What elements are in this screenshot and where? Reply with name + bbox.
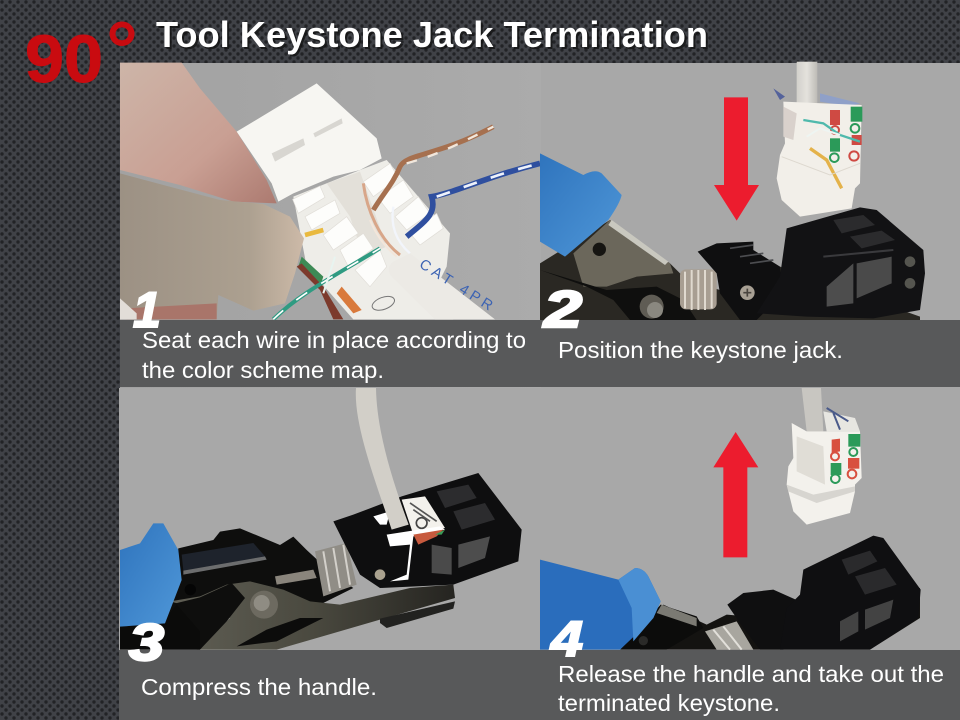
photo: jaw head <box>698 242 783 320</box>
photo: crimp tool body <box>640 588 920 650</box>
panel: step 3 compress the handle <box>119 388 541 720</box>
photo: jaw head <box>727 590 803 650</box>
caption: step 4: Release the handle and take out the <box>558 661 944 687</box>
step number 2: 2 <box>543 281 582 339</box>
photo: handle shaft <box>620 605 703 650</box>
panel: step 4 release and remove <box>540 388 960 720</box>
photo: cable <box>389 253 495 319</box>
panel: step 2 position the jack <box>540 62 960 388</box>
photo: keystone jack <box>787 408 862 525</box>
panel: step 1 seat wires <box>120 63 541 388</box>
caption: step 3 <box>119 650 541 720</box>
photo: cable: CAT 4PR <box>416 256 495 314</box>
photo: cable <box>797 62 817 110</box>
photo: cable <box>802 388 823 431</box>
photo: cable <box>356 388 409 530</box>
step number 1: 1 <box>133 282 161 338</box>
photo: keystone top in tool <box>373 496 445 581</box>
caption: step 1: the color scheme map. <box>142 357 384 383</box>
caption: step 2: Position the keystone jack. <box>558 337 843 363</box>
photo: blue wire <box>392 163 540 253</box>
photo: black die block <box>757 207 925 318</box>
step number 4: 4 <box>550 611 583 667</box>
arrow: down <box>714 97 759 221</box>
caption: step 4 <box>541 650 960 720</box>
photo: collar <box>705 621 753 650</box>
photo: index finger <box>120 63 277 203</box>
photo: keystone jack <box>773 88 862 217</box>
photo: brown wire <box>363 127 493 257</box>
caption: step 1 <box>120 320 541 387</box>
step number 3: 3 <box>129 614 164 672</box>
photo: die block <box>333 473 522 588</box>
photo: grip shadow <box>120 605 200 650</box>
photo: screw collar <box>680 269 717 310</box>
logo: 90 degrees: 90 <box>25 22 103 97</box>
arrow: up <box>713 432 758 557</box>
photo: yellow wire <box>305 230 323 235</box>
caption: step 4: terminated keystone. <box>558 690 780 716</box>
title: Tool Keystone Jack Termination <box>156 14 708 55</box>
photo: crimp tool upper arm <box>170 528 353 608</box>
title: Tool Keystone Jack Termination <box>158 16 710 57</box>
caption: step 2 <box>541 320 960 387</box>
photo: collar <box>315 543 357 596</box>
photo: green wire <box>273 248 380 319</box>
photo: keystone body <box>237 83 453 319</box>
caption: step 3: Compress the handle. <box>141 674 377 700</box>
photo: crimp tool body <box>540 220 920 320</box>
photo: crimp tool lower body <box>163 581 455 650</box>
caption: step 1: Seat each wire in place according to <box>142 327 526 353</box>
logo: 90 degrees <box>25 5 138 97</box>
photo: thumb <box>120 173 304 319</box>
logo: 90 degrees: ° <box>106 5 138 94</box>
photo: blue handle <box>540 560 661 650</box>
photo: blue handle <box>540 153 622 257</box>
photo: blue handle <box>120 523 182 627</box>
photo: die block <box>780 536 921 650</box>
